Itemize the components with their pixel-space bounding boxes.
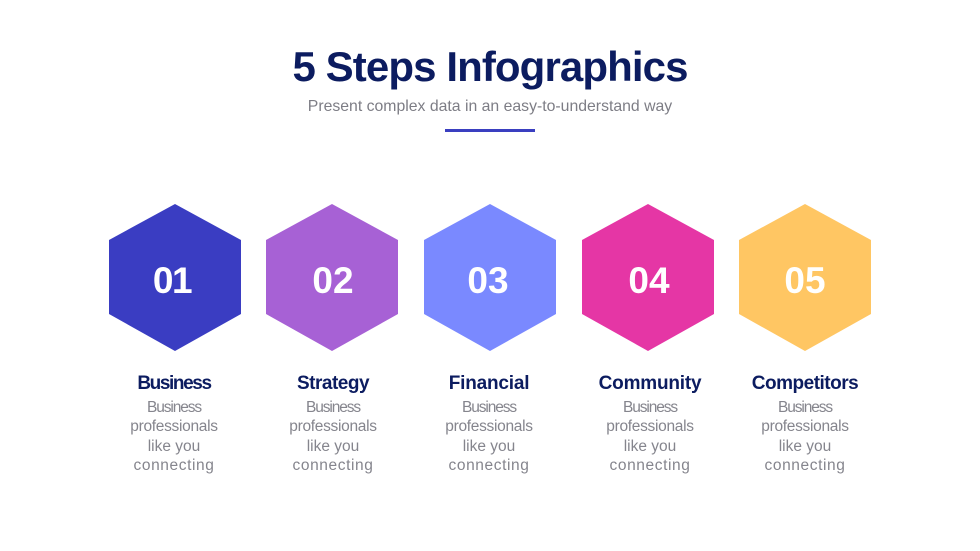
text: step 3 description: connecting xyxy=(448,457,529,474)
hexagon 03 xyxy=(424,204,556,351)
text: step 2 description: professionals xyxy=(289,418,377,435)
hexagon 03: 03 xyxy=(467,260,509,301)
hexagon 04 xyxy=(582,204,714,351)
hexagon 05: 05 xyxy=(784,260,826,301)
text: step 5 description: connecting xyxy=(764,457,845,474)
hexagon 05 xyxy=(739,204,871,351)
text: step 3 description xyxy=(445,399,533,474)
text: step 3 description: Business xyxy=(462,399,516,416)
text: step 1 description: professionals xyxy=(130,418,218,435)
title underline xyxy=(445,129,535,132)
hexagon 04: 04 xyxy=(628,260,670,301)
text: step 2 description: Business xyxy=(306,399,360,416)
text: step 5 description: like you xyxy=(779,438,831,455)
heading: Financial: Financial xyxy=(449,373,529,394)
text: step 3 description: like you xyxy=(463,438,515,455)
text: step 4 description: connecting xyxy=(610,457,690,474)
text: step 4 description: professionals xyxy=(606,418,694,435)
text: step 4 description xyxy=(606,399,694,474)
heading: Strategy: Strategy xyxy=(297,373,369,394)
heading: Community: Community xyxy=(599,373,701,394)
hexagon 01 xyxy=(109,204,241,351)
text: step 4 description: like you xyxy=(624,438,676,455)
text: step 2 description xyxy=(289,399,377,474)
text: step 2 description: connecting xyxy=(292,457,373,474)
text: step 5 description: professionals xyxy=(761,418,849,435)
title: 5 Steps Infographics xyxy=(292,43,688,90)
hexagon 02 xyxy=(266,204,398,351)
hexagon 02: 02 xyxy=(312,260,354,301)
text: step 1 description xyxy=(130,399,218,474)
heading: Business: Business xyxy=(137,373,211,394)
text: step 2 description: like you xyxy=(307,438,359,455)
text: step 3 description: professionals xyxy=(445,418,533,435)
text: step 5 description xyxy=(761,399,849,474)
heading: Competitors: Competitors xyxy=(752,373,858,394)
text: step 1 description: Business xyxy=(147,399,201,416)
hexagon 01: 01 xyxy=(153,260,192,301)
text: step 5 description: Business xyxy=(778,399,832,416)
text: step 4 description: Business xyxy=(623,399,677,416)
text: step 1 description: like you xyxy=(148,438,200,455)
text: step 1 description: connecting xyxy=(134,457,214,474)
subtitle: Present complex data in an easy-to-understand way xyxy=(308,98,672,115)
